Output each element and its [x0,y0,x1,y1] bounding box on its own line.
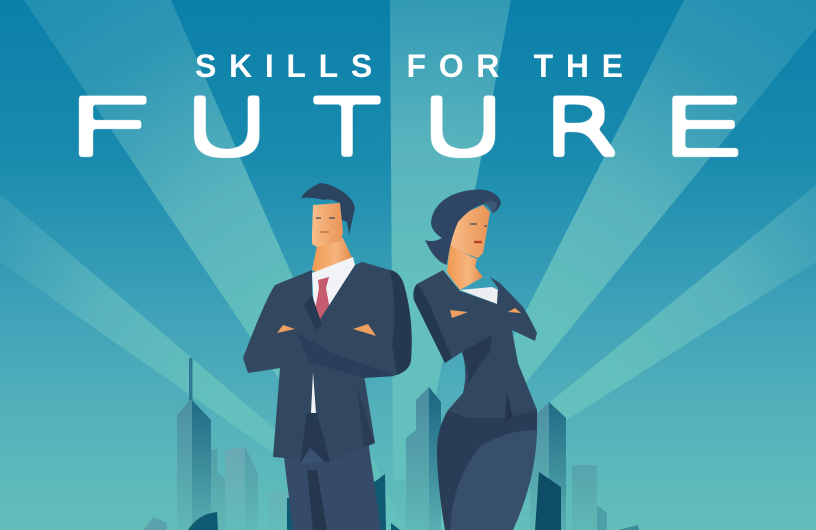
man: right hand [353,324,376,336]
woman: hair [425,190,501,265]
woman: skirt highlight [450,430,537,530]
man: crossed arm shading [296,332,396,378]
man: hair [301,183,355,235]
title: future: T [314,83,380,172]
skyline [143,358,639,530]
title: future: U [421,83,505,172]
man: left hand [277,325,295,333]
man: neck [312,238,352,278]
man: eyes and mouth [316,218,335,232]
title: future: R [543,83,618,172]
man: lapel [304,295,322,330]
woman: face [450,205,490,258]
building: dark dome [188,512,218,530]
man: jacket opening [300,413,330,463]
woman figure [413,190,537,530]
woman: hair brim inner [483,201,497,213]
man: trouser crease [307,470,327,530]
man: sleeve shading [390,270,412,375]
building: right pale towers [572,465,607,530]
woman: top [460,287,498,304]
woman: hands [450,308,521,318]
woman: skirt [437,410,537,530]
man: shirt below arms [311,372,316,413]
title: skills for the: SKILLS FOR THE [195,48,623,84]
building: dark towers near man [287,474,400,530]
title: future [62,83,748,172]
woman: waist shading [462,335,492,385]
title: future: U [184,83,270,172]
woman: eyes and lips [470,224,487,242]
building: left mid towers [211,447,287,530]
building: small left [143,517,167,530]
woman: jacket [413,270,537,418]
man: shirt [312,257,355,330]
building: right dark block [535,472,561,530]
woman: sleeve shading [413,284,452,363]
man: jacket side shading [357,387,375,447]
man: trousers [283,440,381,530]
title: future: E [658,83,748,172]
man: face [312,203,343,247]
man: jacket [243,262,412,462]
man: tie [315,277,330,324]
man figure [243,183,412,530]
building: centre tower [406,387,441,530]
woman: jacket vent [505,392,513,420]
man: trouser wedge [300,448,325,464]
woman: neck and chest [447,245,483,290]
building: right low block [618,525,639,530]
building: left spire tower [177,358,211,530]
building: right tower [530,402,566,530]
title: future: F [62,83,158,172]
